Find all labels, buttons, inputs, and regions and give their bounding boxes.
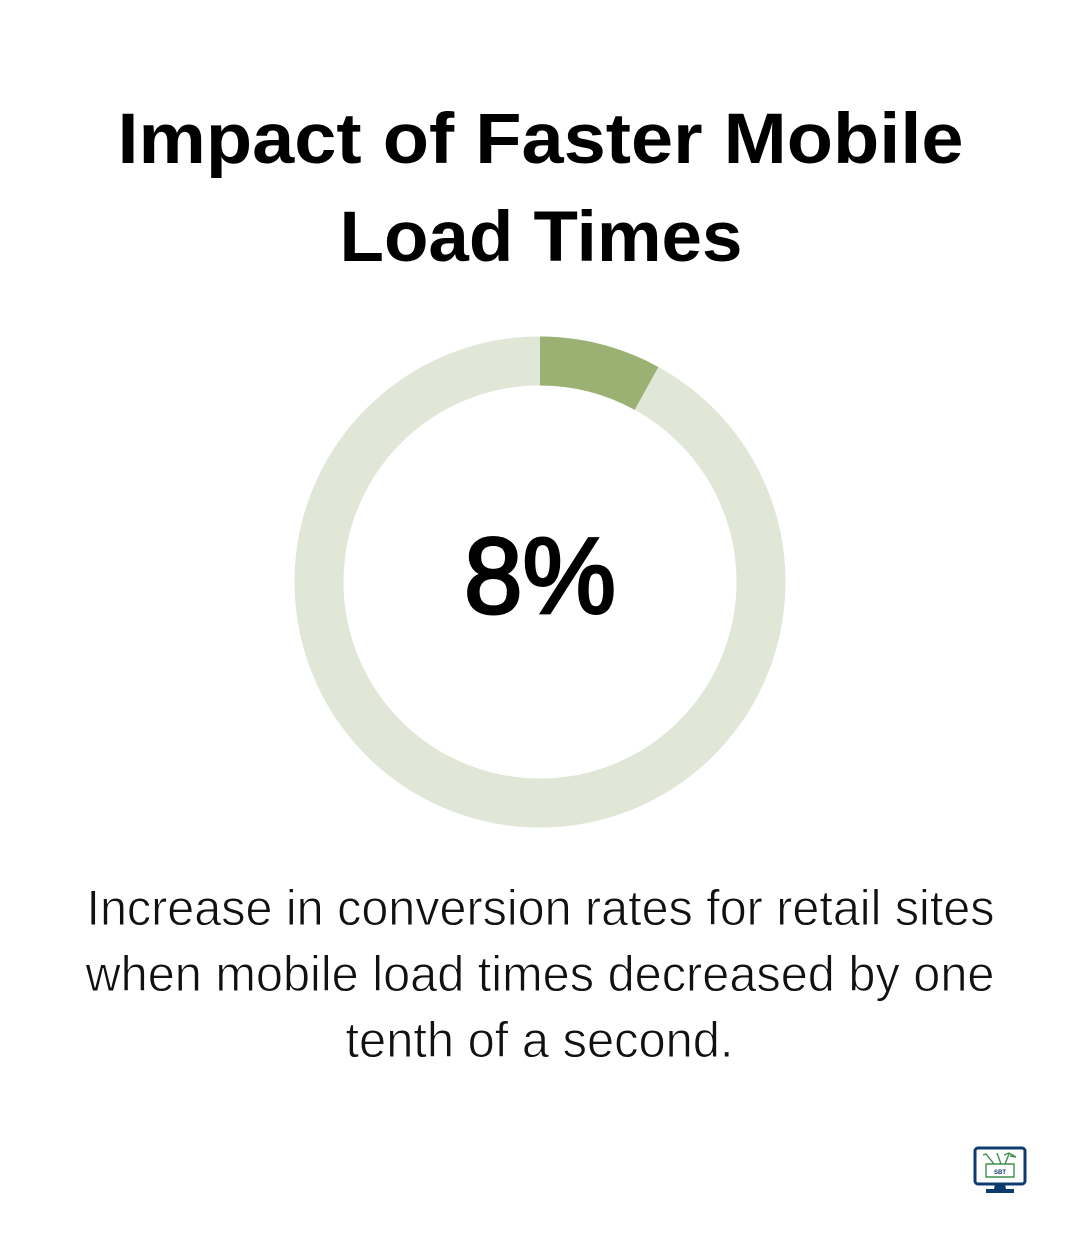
logo text: SBT bbox=[994, 1170, 1006, 1176]
description text: tenth of a second. bbox=[346, 1012, 734, 1068]
donut track bbox=[319, 361, 761, 803]
title: Impact of Faster Mobile bbox=[118, 100, 964, 179]
monitor stand bbox=[986, 1184, 1014, 1193]
toolbox with tools bbox=[983, 1153, 1016, 1177]
title bbox=[118, 100, 964, 277]
icon: computer monitor logo bbox=[975, 1148, 1025, 1193]
description text: when mobile load times decreased by one bbox=[85, 946, 994, 1002]
description text: Increase in conversion rates for retail sites bbox=[86, 880, 994, 936]
description text bbox=[85, 880, 994, 1068]
donut chart: 8% bbox=[319, 361, 761, 803]
donut value: 8% bbox=[464, 515, 616, 636]
title: Load Times bbox=[340, 198, 742, 277]
donut highlighted segment bbox=[540, 361, 646, 388]
monitor screen bbox=[975, 1148, 1025, 1184]
